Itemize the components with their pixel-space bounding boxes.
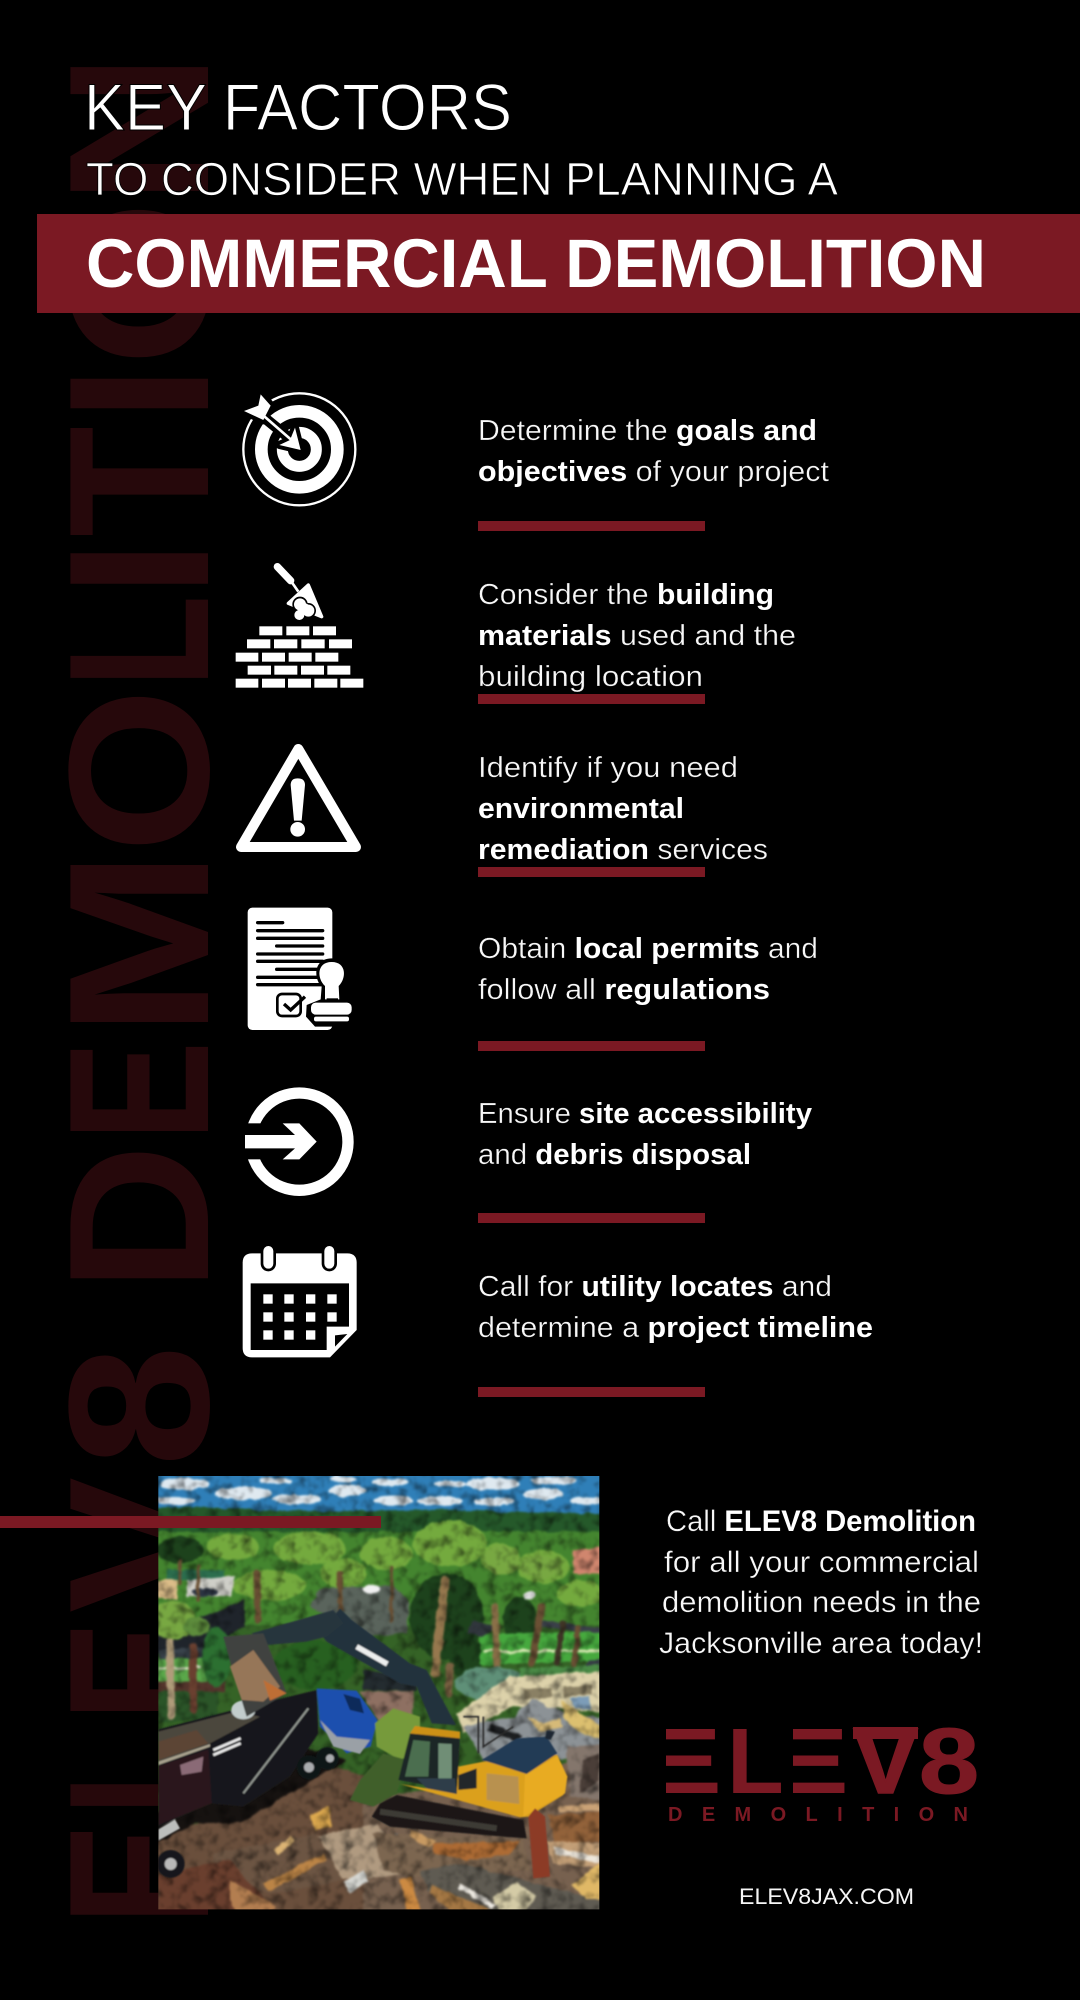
- subtitle: TO CONSIDER WHEN PLANNING A: [86, 153, 838, 205]
- text block: environmental remediation: [478, 752, 768, 877]
- background watermark: ELEV8 DEMOLITION vertical: T: [28, 426, 251, 537]
- icon: calendar: [243, 1245, 357, 1357]
- excavator engine hood: [482, 1737, 557, 1774]
- text block: site access and debris: and debris disposal: [478, 1139, 751, 1171]
- dumpster: [158, 1690, 318, 1827]
- burnt post: [528, 1808, 550, 1878]
- call to action text: Call ELEV8 Demolition: [666, 1505, 976, 1538]
- background watermark: ELEV8 DEMOLITION vertical: [28, 53, 251, 1925]
- bushes beside excavator: [375, 1708, 420, 1760]
- banner: commercial demolition: COMMERCIAL DEMOLITION: [86, 225, 986, 302]
- logo: ELEV8 Demolition: E: [766, 1710, 849, 1813]
- background watermark: ELEV8 DEMOLITION vertical: I: [28, 539, 251, 598]
- banner: commercial demolition: [37, 214, 1080, 313]
- logo: ELEV8 Demolition: L: [727, 1709, 784, 1813]
- logo: ELEV8 Demolition: E: [639, 1710, 722, 1813]
- icon: target with arrow: [243, 393, 355, 505]
- mid trees: [130, 1532, 630, 1625]
- rubble foreground: [318, 1824, 400, 1880]
- background watermark: ELEV8 DEMOLITION vertical: L: [28, 595, 251, 688]
- background watermark: ELEV8 DEMOLITION vertical: D: [28, 1144, 251, 1292]
- call to action text: for all your commercial: [664, 1546, 979, 1579]
- text block: goals and objectives: [478, 415, 829, 531]
- ground: [158, 1766, 365, 1910]
- icon: trowel and bricks: [236, 567, 363, 688]
- call to action text: demolition needs in the: [662, 1586, 981, 1619]
- background watermark: ELEV8 DEMOLITION vertical: V: [28, 1477, 251, 1613]
- shadow under dumpster: [158, 1748, 346, 1842]
- icon: arrow into circle: [242, 1093, 348, 1190]
- text block: environmental remediation: Identify if you need: [478, 752, 738, 784]
- text block: building materials and location: [478, 579, 796, 704]
- text block: permits and regulations: [478, 933, 818, 1051]
- text block: building materials and location: Consider the building: [478, 579, 774, 611]
- accent bar over photo: [0, 1516, 381, 1528]
- text block: utility locates and timeline: determine a project timeline: [478, 1312, 873, 1344]
- logo: ELEV8 Demolition: [634, 1709, 979, 1826]
- logo: ELEV8 Demolition: V: [853, 1710, 918, 1813]
- grey slab: [420, 1864, 600, 1910]
- text block: environmental remediation: remediation services: [478, 834, 768, 866]
- background watermark: ELEV8 DEMOLITION vertical: N: [28, 53, 251, 205]
- distant tree line: [158, 1505, 600, 1533]
- background watermark: ELEV8 DEMOLITION vertical: L: [28, 1724, 251, 1816]
- text block: site access and debris: Ensure site accessibility: [478, 1098, 812, 1130]
- excavator boom and bucket: [320, 1608, 456, 1725]
- blue truck: [317, 1688, 377, 1753]
- text block: permits and regulations: follow all regulations: [478, 974, 770, 1006]
- background watermark: ELEV8 DEMOLITION vertical: O: [28, 688, 251, 853]
- icon: permit document and stamp: [248, 908, 355, 1030]
- logo: ELEV8 Demolition: 8: [919, 1709, 979, 1813]
- background watermark: ELEV8 DEMOLITION vertical: E: [28, 1621, 251, 1721]
- text block: utility locates and timeline: [478, 1271, 873, 1397]
- text block: permits and regulations: Obtain local permits and: [478, 933, 818, 965]
- background watermark: ELEV8 DEMOLITION vertical: O: [28, 201, 251, 366]
- photo: excavator loading demolition debris into a dumpster: [158, 1476, 600, 1910]
- excavator body: [400, 1755, 567, 1817]
- background watermark: ELEV8 DEMOLITION vertical: E: [28, 1823, 251, 1925]
- rubble right: [565, 1744, 600, 1800]
- background watermark: ELEV8 DEMOLITION vertical: M: [28, 850, 251, 1037]
- excavator cab: [398, 1733, 460, 1794]
- palm trunks: [170, 1560, 578, 1717]
- debris behind machine: [463, 1698, 600, 1762]
- website url: ELEV8JAX.COM: [739, 1884, 914, 1909]
- lawn: [478, 1630, 600, 1668]
- call to action text: Jacksonville area today!: [659, 1627, 983, 1660]
- background watermark: ELEV8 DEMOLITION vertical: E: [28, 1041, 251, 1141]
- title: key factors: KEY FACTORS: [84, 71, 512, 144]
- icon: warning triangle: [241, 749, 356, 847]
- text block: environmental remediation: environmental: [478, 793, 684, 825]
- text block: building materials and location: materials used and the: [478, 620, 796, 652]
- logo: ELEV8 Demolition: DEMOLITION: [668, 1804, 968, 1826]
- background watermark: ELEV8 DEMOLITION vertical: 8: [28, 1345, 251, 1467]
- text block: goals and objectives: Determine the goals and: [478, 415, 817, 447]
- call to action text: [659, 1505, 983, 1660]
- text block: goals and objectives: objectives of your project: [478, 456, 829, 488]
- text block: site access and debris: [478, 1098, 812, 1223]
- text block: building materials and location: building location: [478, 661, 703, 693]
- text block: utility locates and timeline: Call for utility locates and: [478, 1271, 832, 1303]
- truck behind and wall behind: [363, 1670, 417, 1691]
- excavator tracks: [372, 1795, 527, 1838]
- background watermark: ELEV8 DEMOLITION vertical: I: [28, 365, 251, 422]
